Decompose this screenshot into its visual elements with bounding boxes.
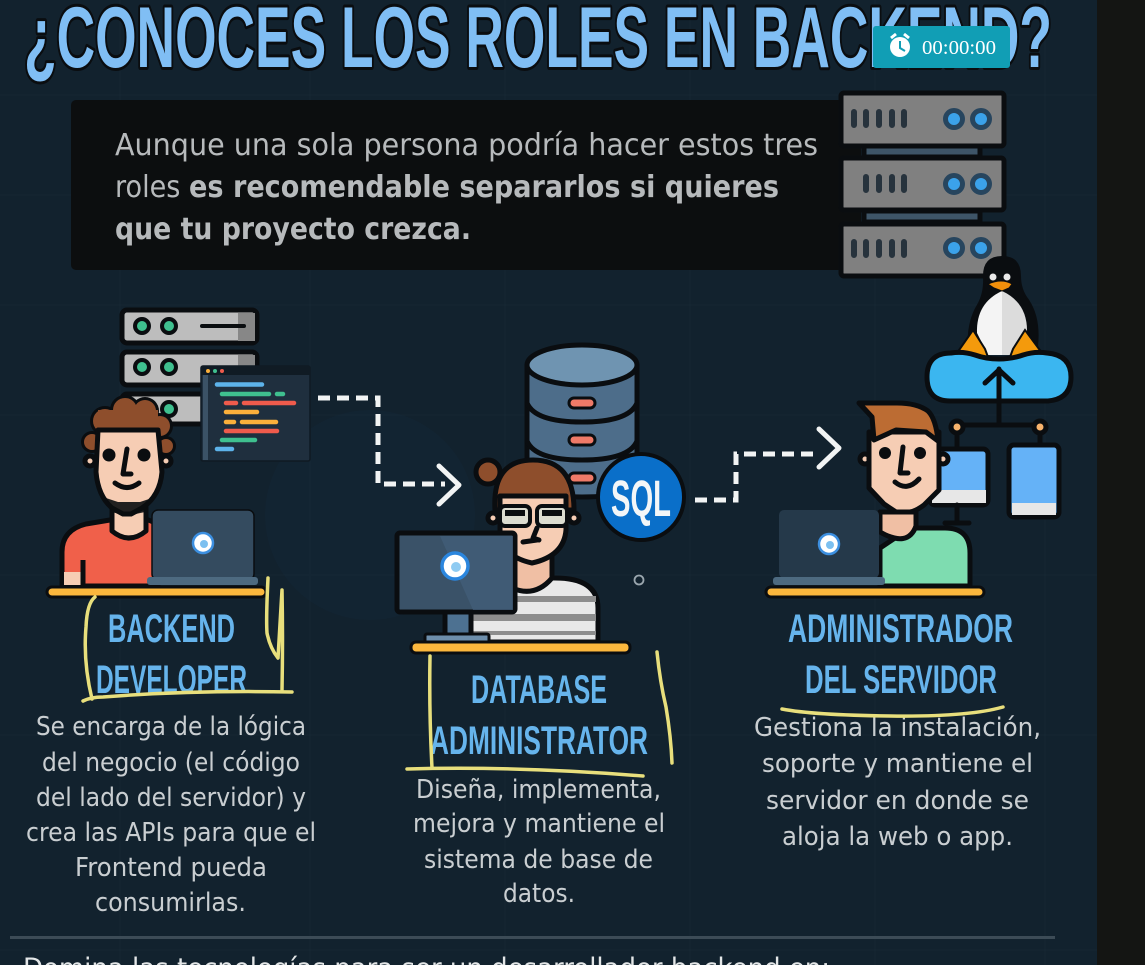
- icon: server rack: [841, 93, 1004, 276]
- description: consumirlas.: [95, 888, 246, 918]
- description: del negocio (el código: [42, 748, 300, 778]
- icon: code window: [201, 366, 310, 461]
- icon: monitor: [397, 533, 515, 643]
- description: [754, 713, 1041, 852]
- icon: phone: [1009, 445, 1059, 517]
- timer badge: 00:00:00: [922, 37, 996, 59]
- illustration: backend developer: [47, 310, 310, 597]
- heading: DATABASE: [471, 668, 607, 712]
- desk: [411, 642, 630, 653]
- description: [26, 712, 316, 918]
- figure: administrator: [470, 460, 598, 642]
- column: backend developer: [26, 607, 316, 918]
- description: crea las APIs para que el: [26, 818, 316, 848]
- intro text panel: roles es recomendable separarlos si quieres: [115, 170, 779, 205]
- description: Gestiona la instalación,: [754, 713, 1041, 743]
- desk: [47, 587, 266, 597]
- icon: desktop: [930, 449, 988, 523]
- column: server administrator: [754, 607, 1041, 852]
- heading: ADMINISTRADOR: [788, 607, 1013, 651]
- heading: BACKEND: [108, 607, 235, 651]
- description: servidor en donde se: [766, 786, 1029, 816]
- description: soporte y mantiene el: [762, 749, 1033, 779]
- heading: [788, 607, 1013, 702]
- description: Se encarga de la lógica: [36, 712, 306, 742]
- description: Frontend pueda: [75, 853, 267, 883]
- icon: laptop: [147, 510, 258, 585]
- figure: administrator: [859, 403, 970, 586]
- heading: ADMINISTRATOR: [430, 719, 648, 763]
- column: database administrator: [413, 668, 665, 909]
- intro text panel: que tu proyecto crezca.: [115, 212, 471, 247]
- heading: [430, 668, 648, 763]
- icon: cloud upload: [927, 352, 1071, 449]
- handwritten highlight: server administrator: [782, 707, 1003, 716]
- description: sistema de base de: [424, 845, 653, 875]
- heading: [96, 607, 247, 702]
- figure: developer: [62, 395, 176, 586]
- illustration: server administrator: [766, 257, 1071, 597]
- icon: SQL badge: [598, 454, 684, 540]
- intro text panel: [71, 100, 861, 270]
- illustration: database administrator: [397, 345, 684, 653]
- heading: DEL SERVIDOR: [805, 658, 997, 702]
- divider: [10, 936, 1055, 939]
- icon: Linux penguin: [957, 257, 1042, 357]
- timer badge: [873, 26, 1010, 68]
- arrow: database to server: [695, 429, 839, 500]
- description: del lado del servidor) y: [36, 783, 306, 813]
- intro text panel: Aunque una sola persona podría hacer estos tres: [115, 128, 818, 163]
- description: aloja la web o app.: [782, 822, 1013, 852]
- handwritten highlight: backend developer: [83, 578, 292, 701]
- icon: SQL badge: SQL: [611, 470, 671, 527]
- cursor ring: [634, 576, 644, 584]
- handwritten highlight: database administrator: [407, 652, 672, 776]
- arrow: developer to database: [318, 398, 459, 504]
- description: [413, 775, 665, 909]
- description: mejora y mantiene el: [413, 809, 665, 839]
- heading: DEVELOPER: [96, 658, 247, 702]
- icon: servers: [122, 310, 257, 424]
- description: Diseña, implementa,: [416, 775, 661, 805]
- description: datos.: [503, 879, 575, 909]
- icon: laptop: [773, 510, 885, 585]
- desk: [766, 587, 984, 597]
- icon: database cylinder: [527, 345, 637, 497]
